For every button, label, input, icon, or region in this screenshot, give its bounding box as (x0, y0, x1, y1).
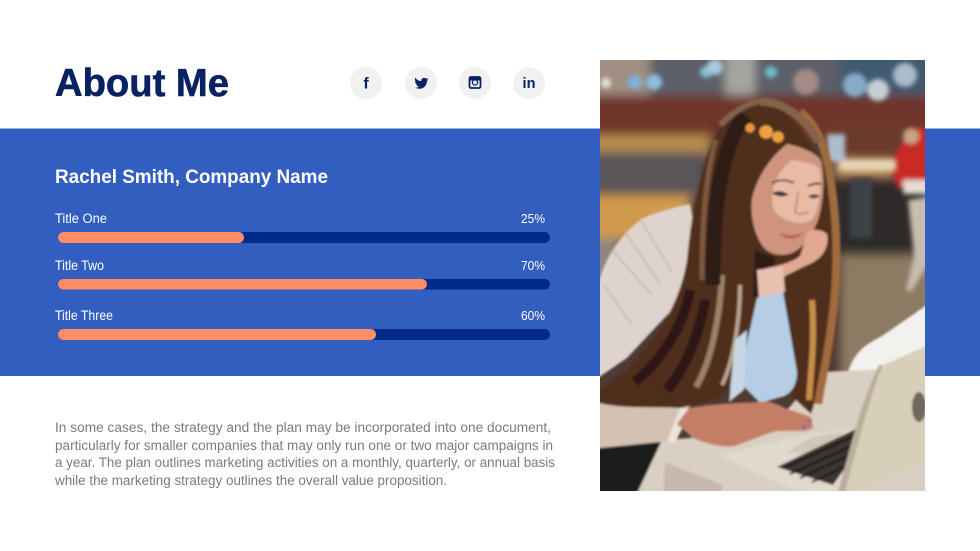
progress: title one (55, 211, 550, 243)
sleeve (740, 292, 797, 403)
progress: title two (55, 258, 550, 290)
progress: title three (55, 308, 550, 340)
body paragraph: In some cases, the strategy and the plan may be incorporated into one document, (55, 420, 551, 435)
blue band (0, 128, 980, 376)
laptop (724, 430, 851, 491)
icon: facebook: f (363, 76, 369, 92)
icon: linkedin: in (523, 76, 535, 92)
icon: linkedin (513, 67, 545, 99)
body paragraph (54, 420, 555, 488)
progress: title three: Title Three (55, 308, 113, 323)
body paragraph: while the marketing strategy outlines the overall value proposition. (54, 473, 447, 488)
white chair (847, 304, 925, 372)
typing hand (677, 401, 813, 446)
hair highlights (745, 123, 784, 143)
marble table (636, 369, 925, 491)
neck shadow (753, 250, 775, 298)
progress: title one: Title One (55, 211, 107, 226)
progress: title one: 25% (521, 211, 545, 226)
long hair (595, 100, 838, 414)
photo: woman working on a laptop (600, 60, 925, 491)
body paragraph: a year. The plan outlines marketing activities on a monthly, quarterly, or annual basis (55, 455, 555, 470)
dark trousers (600, 440, 662, 491)
name heading: Rachel Smith, Company Name (55, 166, 328, 188)
icon: facebook (350, 67, 382, 99)
social icons (350, 67, 545, 99)
sweater (600, 202, 694, 378)
progress: title two: 70% (521, 258, 545, 273)
progress: title three: 60% (521, 308, 545, 323)
icon: twitter (405, 67, 437, 99)
hand on chin (767, 230, 828, 279)
face (751, 144, 823, 255)
progress: title two: Title Two (55, 258, 104, 273)
icon: instagram (459, 67, 491, 99)
title: About Me (55, 62, 229, 105)
body paragraph: particularly for smaller companies that may only run one or two major campaigns in (55, 438, 553, 453)
